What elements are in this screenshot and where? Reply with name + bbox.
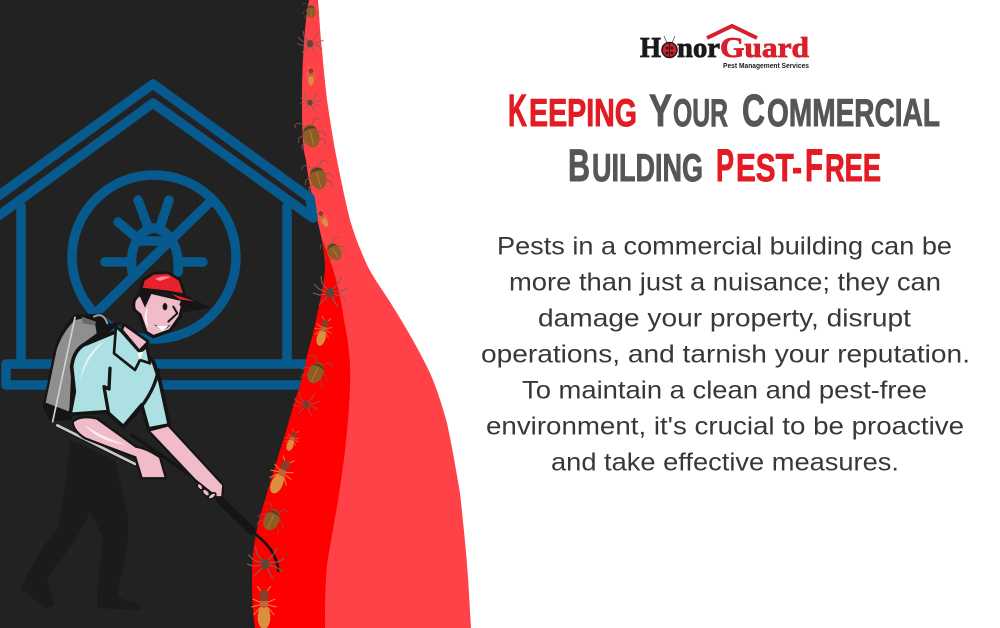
icon: house walls (21, 206, 287, 362)
bug: beetle (293, 117, 328, 151)
logo tagline: Pest Management Services (723, 63, 809, 70)
panel: dark background (0, 0, 325, 628)
title line 1: OUR (673, 92, 728, 135)
title line 2: F (805, 140, 823, 191)
arms (57, 417, 223, 500)
panel: light red wave (250, 0, 471, 628)
title line 1: C (742, 85, 765, 136)
text block: introduction: environment, it's crucial to be proactive (486, 412, 964, 440)
cap shadow (179, 294, 210, 312)
fingers (196, 482, 217, 500)
title (508, 85, 940, 191)
bug: beetle (299, 354, 334, 389)
logo: Honor Guard (640, 26, 809, 70)
logo ladybug (662, 36, 677, 58)
text block: introduction: and take effective measures. (551, 448, 899, 476)
hose and nozzle (132, 435, 278, 571)
bug: beetle (255, 501, 290, 536)
bug: large termite (262, 453, 299, 498)
icon: prohibition circle (72, 175, 236, 339)
bug: large spider (247, 546, 284, 579)
bug: beetle (300, 159, 335, 193)
bug: termite (311, 315, 335, 348)
logo roof (707, 26, 757, 38)
title line 2: P (716, 140, 734, 191)
red cap (141, 273, 185, 295)
right arm (148, 425, 223, 497)
icon: house base (6, 364, 326, 385)
bug: small termite (306, 67, 316, 86)
text block: introduction (481, 232, 970, 476)
illustration: pest control technician (20, 273, 278, 610)
logo wordmark (640, 33, 809, 64)
panel: bright red wave (240, 240, 350, 628)
collar (114, 327, 150, 370)
bug: spider (297, 31, 324, 54)
strap (60, 427, 135, 464)
neck (122, 324, 148, 351)
text block: introduction: To maintain a clean and pest-free (522, 376, 927, 404)
title line 2: EST- (736, 147, 802, 190)
bug: small termite (314, 208, 332, 229)
logo wordmark: Guard (720, 33, 809, 64)
mouth (154, 324, 171, 329)
hair (139, 289, 152, 308)
bug: beetle (319, 235, 349, 265)
bug: large spider (313, 276, 348, 307)
text block: introduction: Pests in a commercial building can be (497, 232, 952, 260)
title line 2: UILDING (592, 147, 703, 190)
bug: large termite (251, 586, 277, 628)
text block: introduction: damage your property, disrupt (538, 304, 911, 332)
head (134, 290, 184, 337)
title line 1: K (508, 85, 527, 136)
face highlight (144, 307, 148, 328)
shirt (70, 332, 169, 429)
logo wordmark: H (640, 33, 661, 64)
shirt folds (104, 368, 158, 427)
title line 1: OMMERCIAL (767, 92, 940, 135)
arm highlight (85, 425, 127, 445)
upper body (43, 273, 210, 429)
bug: spider (300, 92, 321, 111)
title line 2 (568, 140, 881, 191)
bug: small termite (282, 428, 302, 453)
title line 1 (508, 85, 940, 136)
shirt highlight (80, 341, 105, 380)
trousers (20, 440, 142, 610)
icon: prohibition slash (97, 202, 210, 312)
title line 1: Y (649, 85, 672, 136)
left arm and hand (73, 417, 166, 478)
title line 2: REE (825, 147, 881, 190)
text block: introduction: more than just a nuisance; they can (509, 268, 941, 296)
title line 1: EEPING (529, 92, 637, 135)
bug: spider (293, 392, 320, 415)
cap visor (168, 292, 200, 302)
backpack (43, 313, 122, 422)
text block: introduction: operations, and tarnish your reputation. (481, 340, 970, 368)
nose (168, 307, 177, 322)
icon: roof (0, 84, 313, 219)
icon: bug (105, 200, 203, 272)
title line 2: B (568, 140, 590, 191)
icon: house with crossed-out bug (0, 84, 326, 385)
eye (163, 303, 167, 310)
logo wordmark: nor (677, 33, 720, 64)
bug: small beetle (302, 2, 320, 19)
bugs trail along the wave (247, 2, 349, 628)
